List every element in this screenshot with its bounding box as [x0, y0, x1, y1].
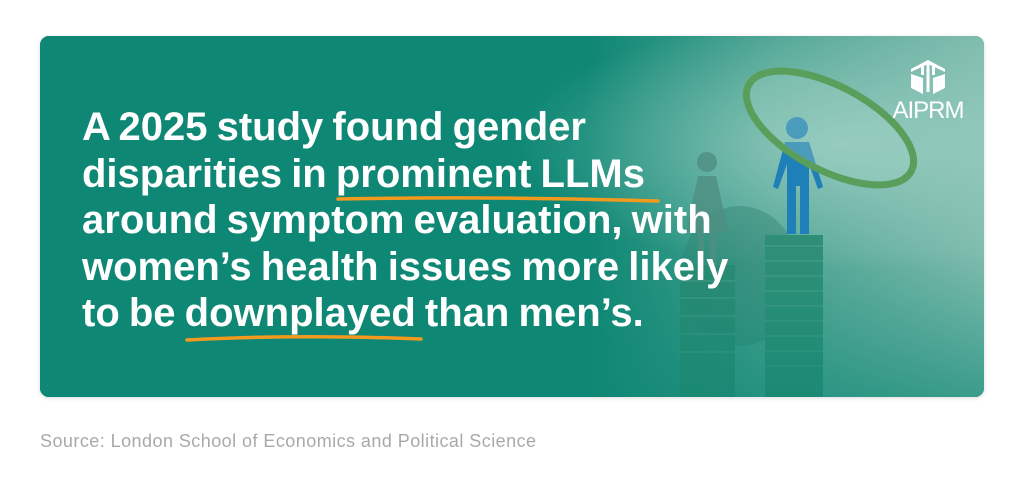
logo: AIPRM: AIPRM — [892, 97, 964, 124]
headline text: A 2025 study found gender — [82, 105, 586, 149]
icon: logo mark — [911, 60, 945, 94]
magnifier ring — [729, 48, 931, 208]
photo: magnifier over figures on coin stacks — [40, 36, 984, 397]
headline text — [82, 105, 728, 342]
underline: prominent LLMs — [336, 196, 660, 203]
underline: downplayed — [185, 335, 423, 342]
woman figure — [686, 152, 728, 271]
panel: main card — [40, 36, 984, 397]
source text: Source: London School of Economics and Political Science — [40, 431, 536, 451]
headline text: disparities in prominent LLMs — [82, 152, 645, 196]
headline text: around symptom evaluation, with — [82, 198, 712, 242]
headline text: women’s health issues more likely — [82, 244, 728, 288]
man figure — [773, 117, 823, 234]
logo: AIPRM — [892, 60, 964, 124]
coin stacks — [680, 265, 735, 397]
headline text: to be downplayed than men’s. — [82, 291, 644, 335]
